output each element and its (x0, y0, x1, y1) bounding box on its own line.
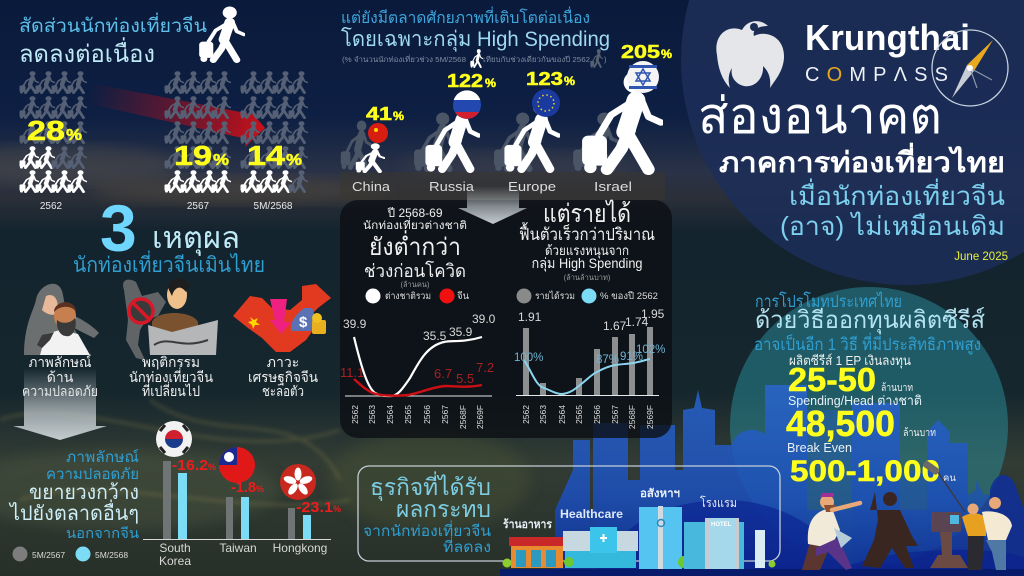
heading: safety spreading: นอกจากจีน (66, 525, 139, 541)
caption: safety image: ความปลอดภัย (22, 383, 98, 399)
heading: high spending: โดยเฉพาะกลุ่ม High Spending (341, 27, 610, 52)
line chart: foreign and Chinese arrivals: 6.7 (434, 366, 452, 381)
caption: slowing economy: ชะลอตัว (262, 383, 304, 399)
heading: revenue: (ล้านล้านบาท) (564, 273, 611, 282)
legend: other markets: 5M/2567 (32, 550, 65, 560)
tagline: (อาจ) ไม่เหมือนเดิม (780, 211, 1005, 241)
heading: reasons: เหตุผล (152, 222, 240, 257)
icon: hotel: โรงแรม (700, 495, 737, 510)
illustration: gorilla suit actor (862, 492, 918, 568)
panel: series circle (730, 287, 1008, 565)
stat: break even: 500-1,000 (790, 455, 940, 488)
heading: share falling (19, 12, 207, 68)
icon: restaurant: ร้านอาหาร (503, 518, 553, 531)
heading: arrivals: ช่วงก่อนโควิด (364, 260, 466, 281)
line chart: foreign and Chinese arrivals: 2564 (385, 405, 395, 424)
heading: series: การโปรโมทประเทศไทย (755, 291, 902, 311)
stat: break even (787, 440, 956, 488)
heading: series (754, 291, 985, 355)
section: 3 reasons (22, 191, 331, 399)
combo chart: revenue and percent of 2562: 1.67 (603, 319, 627, 333)
section: share of Chinese tourists (19, 7, 308, 212)
heading: revenue: กลุ่ม High Spending (532, 255, 642, 272)
market: Europe (494, 69, 575, 194)
caption: slowing economy (248, 354, 318, 399)
bar chart: other markets: Taiwan (219, 541, 257, 555)
market: China: % (393, 109, 404, 123)
market: Russia: % (485, 76, 496, 90)
stat: spending per head: Spending/Head ต่างชาติ (788, 393, 922, 408)
stat: investment: 25-50 (788, 361, 876, 398)
stat: investment (788, 353, 913, 398)
legend: revenue (516, 288, 658, 304)
combo chart: revenue and percent of 2562: 2568F (627, 405, 637, 429)
heading: high spending (341, 6, 610, 52)
heading: share falling: สัดส่วนนักท่องเที่ยวจีน (19, 12, 207, 37)
heading: affected businesses: ผลกระทบ (396, 496, 491, 522)
icon: real estate tower: อสังหาฯ (640, 487, 680, 500)
value: 14 percent (247, 140, 302, 171)
note: (% จำนวนนักท่องเที่ยวช่วง 5M/2568 (342, 54, 466, 64)
legend: arrivals (366, 288, 470, 304)
illustration: director (802, 493, 860, 570)
market: China (341, 104, 404, 194)
caption: changed behaviour (129, 354, 213, 399)
heading: revenue (519, 199, 655, 282)
market: Israel: % (661, 47, 672, 61)
frame (358, 466, 780, 561)
change labels: % (256, 484, 264, 494)
heading: safety spreading: ภาพลักษณ์ (66, 449, 139, 466)
line chart: foreign and Chinese arrivals: 2567 (440, 405, 450, 424)
combo chart: revenue and percent of 2562: 2562 (521, 405, 531, 424)
icon: restaurant (502, 518, 565, 568)
value: 28 percent (27, 115, 82, 146)
line chart: foreign and Chinese arrivals: 7.2 (476, 360, 494, 375)
note (342, 49, 607, 68)
caption: changed behaviour: ที่เปลี่ยนไป (142, 382, 200, 399)
line chart: foreign and Chinese arrivals: 39.0 (472, 312, 496, 326)
panel: central chart backing (340, 200, 672, 438)
pictogram: 5M/2568 (240, 71, 308, 193)
heading: affected businesses: ธุรกิจที่ได้รับ (370, 471, 491, 501)
number 3: 3 (100, 191, 137, 265)
caption: safety image: ภาพลักษณ์ (28, 354, 92, 370)
market: Europe: % (564, 74, 575, 88)
caption: slowing economy: เศรษฐกิจจีน (248, 369, 318, 386)
illustration: camera crew (930, 497, 1012, 570)
heading: affected businesses: ที่ลดลง (443, 536, 491, 556)
line chart: foreign and Chinese arrivals: 35.5 (423, 329, 447, 343)
combo chart: revenue and percent of 2562: 1.74 (625, 315, 649, 329)
logo: Compass wordmark: C O MPΛSS (805, 64, 948, 86)
line chart: foreign and Chinese arrivals: 2565 (403, 405, 413, 424)
heading: arrivals: ยังต่ำกว่า (369, 230, 461, 261)
caption: safety image: ด้าน (47, 369, 74, 385)
section: high spending markets (340, 6, 672, 200)
icon: real estate tower (639, 487, 690, 569)
market: Europe: 123 (526, 69, 563, 89)
value: 28 percent: 28 (27, 115, 65, 146)
market: China: China (352, 179, 391, 194)
combo chart: revenue and percent of 2562: 2563 (538, 405, 548, 424)
combo chart: revenue and percent of 2562: 2567 (610, 405, 620, 424)
value: 28 percent: % (66, 127, 82, 144)
line chart: foreign and Chinese arrivals: 11.1 (340, 365, 364, 380)
pictogram: 2567 (164, 71, 230, 193)
ground band (340, 172, 665, 200)
heading: affected businesses (363, 471, 491, 556)
heading: arrivals (363, 206, 467, 289)
heading: revenue: ด้วยแรงหนุนจาก (545, 243, 629, 259)
stat: spending per head: ล้านบาท (903, 427, 936, 439)
year labels (40, 201, 293, 212)
market: Russia: 122 (447, 71, 483, 91)
illustration: boom microphone (922, 460, 965, 512)
tagline (780, 178, 1005, 241)
icon: hospital (560, 509, 638, 568)
combo chart: revenue and percent of 2562: 102% (636, 344, 665, 356)
logo: Krungthai bird (716, 21, 784, 88)
combo chart: revenue and percent of 2562: 2569F (645, 405, 655, 429)
heading: share falling: ลดลงต่อเนื่อง (19, 37, 155, 68)
change labels: -16.2 (172, 458, 208, 474)
stat: spending per head: 48,500 (786, 403, 895, 444)
ground strip (500, 569, 1024, 576)
flag: Hong Kong (280, 464, 316, 500)
legend: other markets: 5M/2568 (95, 550, 128, 560)
date: June 2025 (954, 251, 1008, 263)
skyline shadow (595, 500, 1024, 576)
caption: changed behaviour: พฤติกรรม (142, 354, 200, 370)
caption: safety image (22, 354, 98, 399)
combo chart: revenue and percent of 2562: 1.91 (518, 310, 542, 324)
panel: arrivals chart (340, 206, 496, 429)
heading: reasons (73, 222, 265, 277)
market: Europe: Europe (508, 179, 556, 194)
caption: changed behaviour: นักท่องเที่ยวจีน (129, 368, 213, 385)
heading: safety spreading: ขยายวงกว้าง (29, 482, 139, 504)
heading: safety spreading: ความปลอดภัย (46, 466, 139, 483)
value: 14 percent: % (286, 152, 302, 169)
combo chart: revenue and percent of 2562: 87% (596, 354, 619, 366)
year labels: 5M/2568 (254, 201, 293, 212)
arrow: red decline (90, 83, 265, 147)
heading: safety spreading (8, 449, 139, 541)
value: 19 percent: 19 (174, 140, 212, 171)
legend: other markets (12, 546, 128, 562)
bar chart: other markets: Hongkong (273, 541, 327, 555)
combo chart: revenue and percent of 2562: 100% (514, 352, 543, 364)
tagline: เมื่อนักท่องเที่ยวจีน (789, 178, 1005, 211)
line chart: foreign and Chinese arrivals: 39.9 (343, 317, 367, 331)
combo chart: revenue and percent of 2562: 1.95 (641, 307, 665, 321)
icon: China economy (233, 284, 331, 352)
subtitle: ภาคการท่องเที่ยวไทย (719, 142, 1005, 178)
line chart: foreign and Chinese arrivals: 2568F (458, 405, 468, 429)
bar chart: other markets: South (159, 541, 191, 555)
icon: big traveller (199, 7, 244, 62)
heading: arrivals: ปี 2568-69 (387, 206, 443, 220)
line chart: foreign and Chinese arrivals: 2563 (367, 405, 377, 424)
section: series production promotion (754, 291, 1012, 570)
legend: arrivals: จีน (457, 290, 470, 302)
icon: hospital: Healthcare (560, 509, 623, 521)
icon: hotel (684, 495, 776, 569)
heading: series: อาจเป็นอีก 1 วิธี ที่มีประสิทธิภาพสูง (754, 332, 981, 355)
change labels: -1.8 (231, 480, 256, 496)
market: Israel: 205 (621, 42, 660, 62)
caption: slowing economy: ภาวะ (267, 354, 299, 370)
heading: affected businesses: จากนักท่องเที่ยวจีน (363, 520, 491, 540)
combo chart: revenue and percent of 2562: 2565 (574, 405, 584, 424)
note: เทียบกับช่วงเดียวกันของปี 2562 (483, 55, 590, 64)
line chart: foreign and Chinese arrivals: 2569F (475, 405, 485, 429)
panel: revenue chart (514, 199, 665, 429)
market: Russia (414, 71, 496, 194)
change labels: % (333, 504, 341, 514)
icon: traveller with map (123, 279, 218, 360)
change labels: -23.1 (296, 500, 333, 516)
line chart: foreign and Chinese arrivals: 5.5 (456, 371, 474, 386)
heading: high spending: แต่ยังมีตลาดศักยภาพที่เติบโตต่อเนื่อง (341, 6, 590, 27)
line chart: foreign and Chinese arrivals: 2562 (350, 405, 360, 424)
flag: South Korea (156, 421, 192, 457)
heading: revenue: ฟื้นตัวเร็วกว่าปริมาณ (519, 222, 655, 244)
stat: investment: ผลิตซีรีส์ 1 EP เงินลงทุน (789, 353, 911, 369)
skyline (555, 385, 1024, 576)
year labels: 2562 (40, 201, 63, 212)
market: Russia: Russia (429, 179, 475, 194)
heading: revenue: แต่รายได้ (543, 199, 631, 228)
note: ) (604, 55, 607, 64)
value: 19 percent (174, 140, 229, 171)
legend: arrivals: ต่างชาติรวม (385, 291, 431, 302)
icon: compass (932, 30, 1008, 106)
icon: hotel: HOTEL (711, 522, 732, 528)
logo: Krungthai wordmark: Krungthai (805, 17, 970, 58)
value: 14 percent: 14 (247, 140, 286, 171)
line chart: foreign and Chinese arrivals (340, 312, 496, 429)
combo chart: revenue and percent of 2562 (514, 307, 665, 429)
year labels: 2567 (187, 201, 210, 212)
combo chart: revenue and percent of 2562: 2566 (592, 405, 602, 424)
value: 19 percent: % (213, 152, 229, 169)
change labels (172, 458, 341, 516)
heading: arrivals: (ล้านคน) (400, 280, 430, 289)
legend: revenue: รายได้รวม (535, 290, 575, 302)
combo chart: revenue and percent of 2562: 91% (620, 351, 643, 363)
line chart: foreign and Chinese arrivals: 35.9 (449, 325, 473, 339)
section: affected businesses (358, 466, 780, 569)
market: China: 41 (366, 104, 392, 124)
bar chart: other markets: Korea (159, 554, 191, 568)
arrow: centre down (458, 186, 527, 224)
heading: arrivals: นักท่องเที่ยวต่างชาติ (363, 217, 467, 232)
stat: break even: คน (943, 473, 956, 484)
title: ส่องอนาคต (698, 88, 942, 144)
change labels: % (208, 462, 216, 472)
line chart: foreign and Chinese arrivals: 2566 (422, 405, 432, 424)
heading: safety spreading: ไปยังตลาดอื่นๆ (8, 499, 139, 525)
combo chart: revenue and percent of 2562: 2564 (557, 405, 567, 424)
heading: reasons: นักท่องเที่ยวจีนเมินไทย (73, 250, 265, 277)
panel: title circle (681, 0, 1024, 285)
bar chart: other markets (143, 461, 331, 568)
heading: series: ด้วยวิธีออกทุนผลิตซีรีส์ (755, 306, 985, 335)
stat: investment: ล้านบาท (881, 382, 913, 394)
stat: break even: Break Even (787, 440, 852, 455)
icon: hooded threat (24, 284, 99, 355)
arrow: left down (13, 368, 107, 440)
flag: Taiwan (219, 447, 255, 483)
stat: spending per head (786, 393, 936, 444)
market: Israel (573, 42, 672, 194)
legend: revenue: % ของปี 2562 (600, 290, 658, 302)
icon: China economy: $ (299, 314, 308, 331)
section: title block (698, 17, 1008, 263)
market: Israel: Israel (594, 179, 632, 194)
section: other markets (8, 421, 341, 568)
pictogram: 2562 (20, 71, 86, 193)
